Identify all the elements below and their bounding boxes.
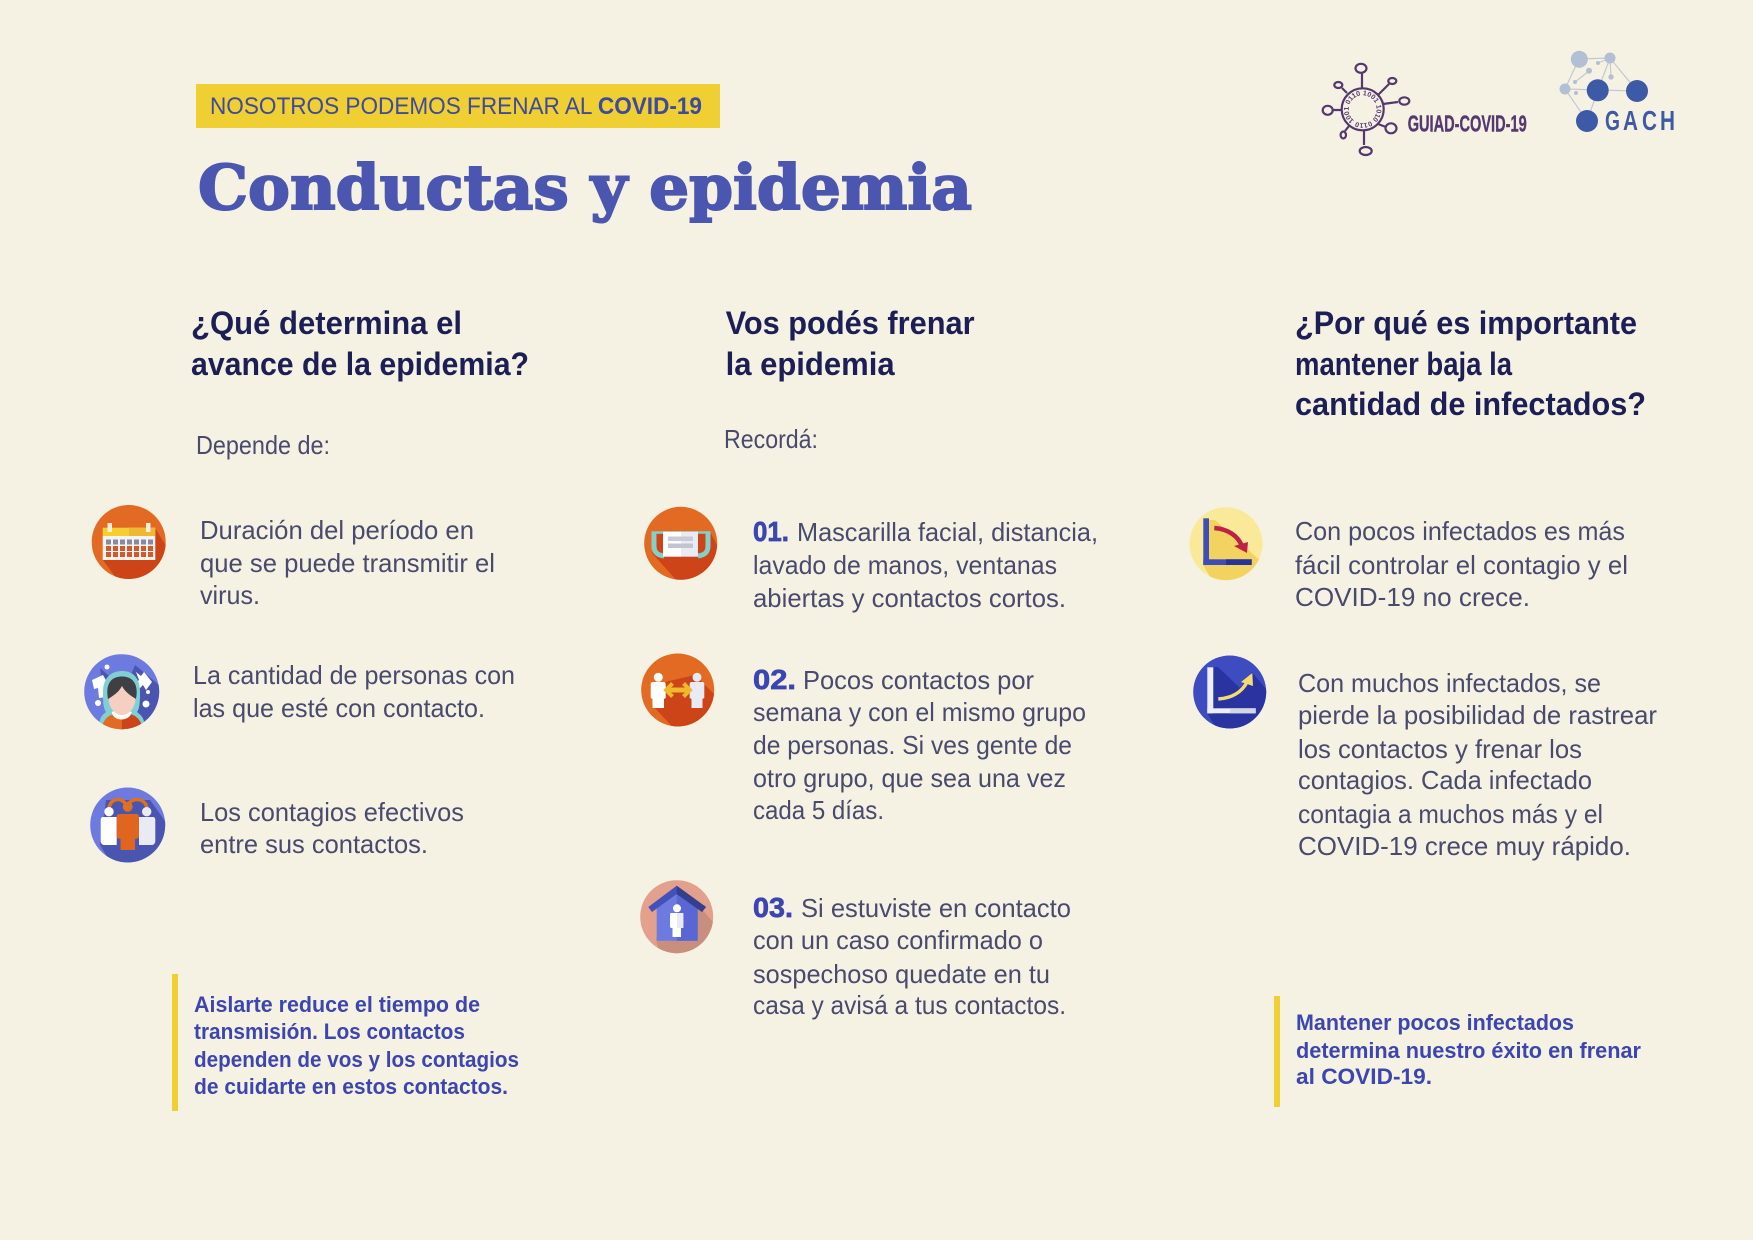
heading: column 2: la epidemia xyxy=(726,346,895,382)
text: rule 03: 03. xyxy=(753,892,793,923)
text: few infected xyxy=(1295,516,1628,612)
text: rule 03: con un caso confirmado o xyxy=(753,925,1043,955)
icon: person with arrows xyxy=(84,654,160,730)
text: rule 03: Si estuviste en contacto xyxy=(801,893,1071,923)
text: duration: virus. xyxy=(200,580,260,610)
icon: calendar xyxy=(92,505,166,579)
heading: column 2: Vos podés frenar xyxy=(726,305,975,341)
text: duration: Duración del período en xyxy=(200,515,474,545)
callout: isolating: transmisión. Los contactos xyxy=(194,1019,465,1044)
logo: GACH: C xyxy=(1642,105,1657,136)
text: rule 03: sospechoso quedate en tu xyxy=(753,959,1050,989)
text: effective contagions: entre sus contactos. xyxy=(200,829,428,859)
logo: GACH: G xyxy=(1605,105,1620,136)
text: many infected: pierde la posibilidad de rastrear xyxy=(1298,700,1657,730)
intro: recordá: Recordá: xyxy=(724,424,818,454)
heading: column 3: cantidad de infectados? xyxy=(1295,386,1646,422)
text: rule 03 xyxy=(753,892,1071,1020)
heading: column 1 xyxy=(191,305,529,382)
callout: keep infections low: determina nuestro éxito en frenar xyxy=(1296,1038,1641,1063)
text: rule 02: Pocos contactos por xyxy=(803,665,1034,695)
heading: column 1: ¿Qué determina el xyxy=(191,305,462,341)
text: rule 02: cada 5 días. xyxy=(753,795,884,825)
callout: isolating: Aislarte reduce el tiempo de xyxy=(194,992,480,1017)
icon: person at home xyxy=(640,880,714,954)
icon: falling curve chart xyxy=(1190,507,1262,580)
text: number of people xyxy=(193,660,515,723)
text: rule 01: 01. xyxy=(753,516,789,547)
text: rule 01 xyxy=(753,516,1098,613)
banner xyxy=(196,84,720,128)
logo: GUIAD-COVID-19 xyxy=(1322,62,1527,156)
icon: two people keeping distance xyxy=(641,654,714,726)
text: number of people: las que esté con contacto. xyxy=(193,693,485,723)
logo: GACH xyxy=(1560,51,1675,136)
callout: isolating: de cuidarte en estos contactos. xyxy=(194,1074,508,1099)
text: effective contagions xyxy=(200,797,464,859)
text: rule 01: lavado de manos, ventanas xyxy=(753,550,1057,580)
icon: group of people xyxy=(90,788,166,862)
banner: NOSOTROS PODEMOS FRENAR AL COVID-19 xyxy=(210,93,702,120)
text: few infected: fácil controlar el contagio y el xyxy=(1295,550,1628,580)
logo: GACH: A xyxy=(1623,105,1638,136)
callout: keep infections low: Mantener pocos infectados xyxy=(1296,1010,1574,1035)
heading: column 3: mantener baja la xyxy=(1295,346,1512,382)
intro: depende de: Depende de: xyxy=(196,430,330,460)
logo: GUIAD-COVID-19: GUIAD-COVID-19 xyxy=(1408,111,1527,137)
callout: keep infections low xyxy=(1274,996,1641,1107)
column: what determines the epidemic xyxy=(84,305,529,1111)
text: many infected: COVID-19 crece muy rápido. xyxy=(1298,831,1631,861)
callout: keep infections low: al COVID-19. xyxy=(1296,1064,1432,1089)
text: many infected: Con muchos infectados, se xyxy=(1298,668,1601,698)
text: many infected xyxy=(1298,668,1657,861)
text: rule 01: abiertas y contactos cortos. xyxy=(753,583,1066,613)
heading: column 1: avance de la epidemia? xyxy=(191,346,529,382)
text: effective contagions: Los contagios efectivos xyxy=(200,797,464,827)
text: many infected: contagios. Cada infectado xyxy=(1298,765,1592,795)
text: few infected: Con pocos infectados es más xyxy=(1295,516,1625,546)
text: rule 01: Mascarilla facial, distancia, xyxy=(797,517,1098,547)
text: rule 02 xyxy=(753,664,1086,825)
text: rule 02: de personas. Si ves gente de xyxy=(753,730,1072,760)
infographic canvas xyxy=(84,50,1674,1111)
text: rule 02: semana y con el mismo grupo xyxy=(753,697,1086,727)
heading: column 2 xyxy=(726,305,975,382)
text: many infected: contagia a muchos más y el xyxy=(1298,799,1603,829)
column: you can stop the epidemic xyxy=(640,305,1098,1020)
text: few infected: COVID-19 no crece. xyxy=(1295,582,1530,612)
text: rule 02: otro grupo, que sea una vez xyxy=(753,763,1066,793)
text: duration: que se puede transmitir el xyxy=(200,548,495,578)
text: many infected: los contactos y frenar los xyxy=(1298,734,1582,764)
title: Conductas y epidemia xyxy=(198,151,972,224)
heading: column 3 xyxy=(1295,305,1646,422)
text: duration xyxy=(200,515,495,610)
logo: GACH: H xyxy=(1660,105,1675,136)
icon: face mask xyxy=(644,506,718,580)
text: rule 02: 02. xyxy=(753,664,796,695)
callout: isolating xyxy=(172,974,519,1111)
text: number of people: La cantidad de personas con xyxy=(193,660,515,690)
column: why keep infections low xyxy=(1190,305,1657,1107)
text: rule 03: casa y avisá a tus contactos. xyxy=(753,990,1066,1020)
callout: isolating: dependen de vos y los contagios xyxy=(194,1047,519,1072)
icon: rising curve chart xyxy=(1193,656,1266,728)
heading: column 3: ¿Por qué es importante xyxy=(1295,305,1637,341)
